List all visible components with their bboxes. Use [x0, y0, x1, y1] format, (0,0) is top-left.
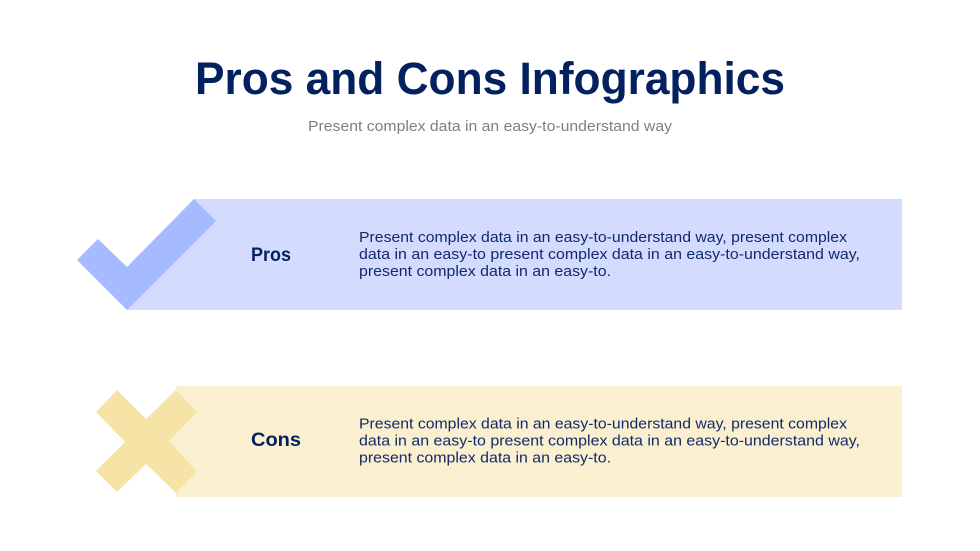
cons text block: data in an easy-to present complex data in an easy-to-understand way, [359, 432, 860, 450]
subtitle: Present complex data in an easy-to-understand way [308, 118, 673, 135]
pros background band [127, 199, 902, 310]
pros heading: Pros [251, 245, 291, 266]
panel: cons [96, 386, 902, 497]
cons heading: Cons [251, 430, 301, 451]
pros text block: Present complex data in an easy-to-understand way, present complex [359, 229, 848, 246]
icon: check mark [77, 199, 216, 310]
pros text block: present complex data in an easy-to. [359, 263, 611, 280]
title: Pros and Cons Infographics [195, 53, 785, 104]
cons text block: Present complex data in an easy-to-understand way, present complex [359, 416, 848, 432]
pros text block [359, 229, 860, 280]
cons background band [170, 386, 902, 497]
icon: cross mark [96, 390, 197, 493]
panel: pros [77, 199, 902, 310]
cons text block: present complex data in an easy-to. [359, 450, 611, 466]
pros text block: data in an easy-to present complex data in an easy-to-understand way, [359, 246, 860, 263]
cons text block [359, 416, 860, 466]
